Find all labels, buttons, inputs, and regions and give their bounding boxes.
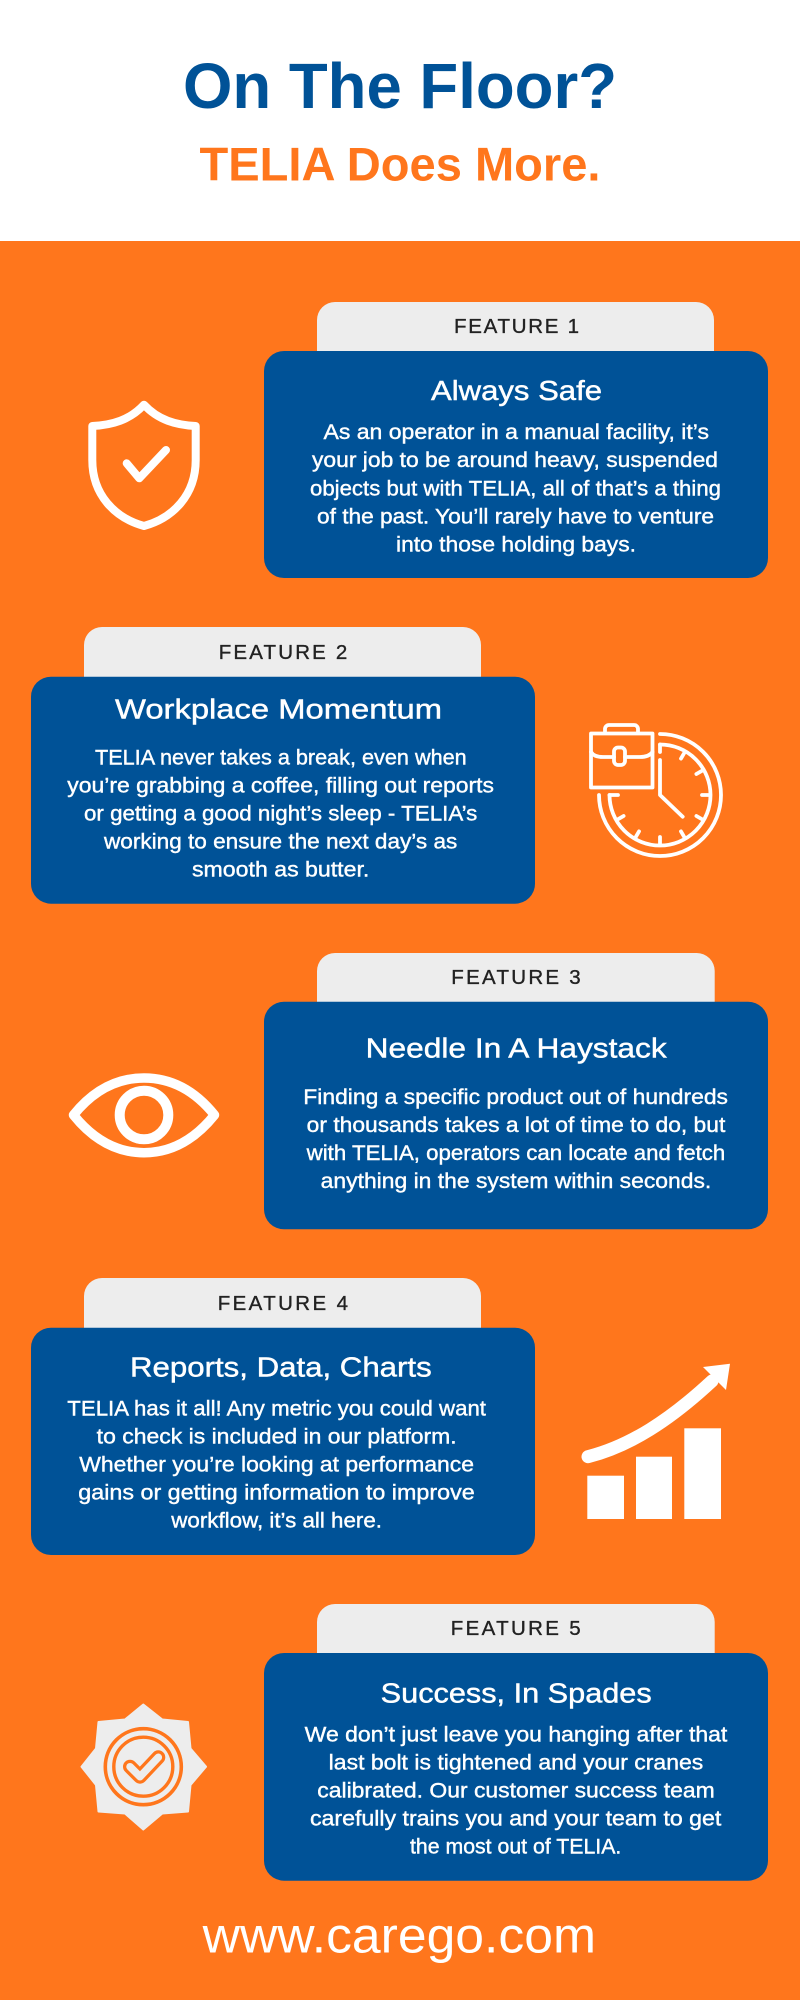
body text: workplace momentum: you’re grabbing a coffee, filling out reports [67,774,494,797]
body text: success, in spades: last bolt is tightened and your cranes [329,1751,703,1774]
body text: workplace momentum: smooth as butter. [192,858,369,881]
body text: needle in a haystack: or thousands takes a lot of time to do, but [307,1114,725,1137]
card: needle in a haystack [264,1002,768,1229]
tab: feature 2: FEATURE 2 [219,641,347,664]
icon: briefcase and clock [591,725,721,856]
icon: badge with check [82,1704,206,1830]
body text: reports, data, charts: Whether you’re looking at performance [79,1453,474,1476]
body text: reports, data, charts: workflow, it’s all here. [170,1509,382,1532]
header band [0,0,800,241]
heading: workplace momentum: Workplace Momentum [115,693,442,724]
body text: success, in spades: carefully trains you and your team to get [310,1807,721,1830]
body text: reports, data, charts: gains or getting information to improve [78,1481,475,1504]
body text: workplace momentum [67,746,494,881]
card: success, in spades [264,1653,768,1881]
panel: feature 3 [264,953,768,1229]
card: reports, data, charts [31,1328,535,1555]
subtitle: TELIA Does More. [200,138,600,191]
card: workplace momentum [31,677,535,904]
panel: feature 5 [264,1604,768,1881]
body text: reports, data, charts: to check is included in our platform. [97,1425,457,1448]
tab: feature 2 [84,627,481,686]
heading: needle in a haystack: Needle In A Haystack [366,1033,668,1064]
panel: feature 2 [31,627,535,904]
body text: success, in spades: the most out of TELIA. [410,1835,621,1858]
body text: always safe: into those holding bays. [396,534,636,556]
body text: needle in a haystack [303,1086,728,1193]
icon: rising bar chart with arrow [587,1364,730,1519]
tab: feature 1: FEATURE 1 [454,315,579,338]
icon: shield with check [92,405,196,526]
tab: feature 5: FEATURE 5 [451,1617,581,1640]
body text: success, in spades: We don’t just leave you hanging after that [305,1723,727,1746]
heading: success, in spades: Success, In Spades [381,1677,652,1708]
panel: feature 1 [264,302,768,578]
body text: needle in a haystack: anything in the system within seconds. [321,1170,711,1193]
body text: reports, data, charts: TELIA has it all! Any metric you could want [67,1397,486,1420]
tab: feature 4: FEATURE 4 [218,1292,348,1315]
tab: feature 3 [317,953,715,1012]
body text: always safe: your job to be around heavy, suspended [312,449,718,472]
body text: always safe: As an operator in a manual facility, it’s [324,421,709,444]
body text: needle in a haystack: Finding a specific product out of hundreds [303,1086,728,1109]
body text: needle in a haystack: with TELIA, operators can locate and fetch [306,1142,725,1165]
body text: workplace momentum: working to ensure the next day’s as [103,830,457,853]
body text: always safe [310,421,721,556]
body text: workplace momentum: TELIA never takes a break, even when [95,746,467,769]
tab: feature 5 [317,1604,715,1663]
heading: always safe: Always Safe [431,375,602,406]
body text: workplace momentum: or getting a good night’s sleep - TELIA’s [84,802,477,825]
body text: reports, data, charts [67,1397,486,1532]
tab: feature 4 [84,1278,481,1338]
panel: feature 4 [31,1278,535,1555]
body text: success, in spades [305,1723,727,1858]
footer url: www.carego.com [202,1907,596,1963]
body text: always safe: objects but with TELIA, all of that’s a thing [310,477,721,500]
title: On The Floor? [183,50,617,122]
icon: eye [74,1078,214,1153]
body text: always safe: of the past. You’ll rarely have to venture [317,505,714,528]
heading: reports, data, charts: Reports, Data, Charts [130,1351,432,1382]
tab: feature 3: FEATURE 3 [451,966,581,989]
tab: feature 1 [317,302,714,360]
body text: success, in spades: calibrated. Our customer success team [317,1779,715,1802]
card: always safe [264,351,768,578]
